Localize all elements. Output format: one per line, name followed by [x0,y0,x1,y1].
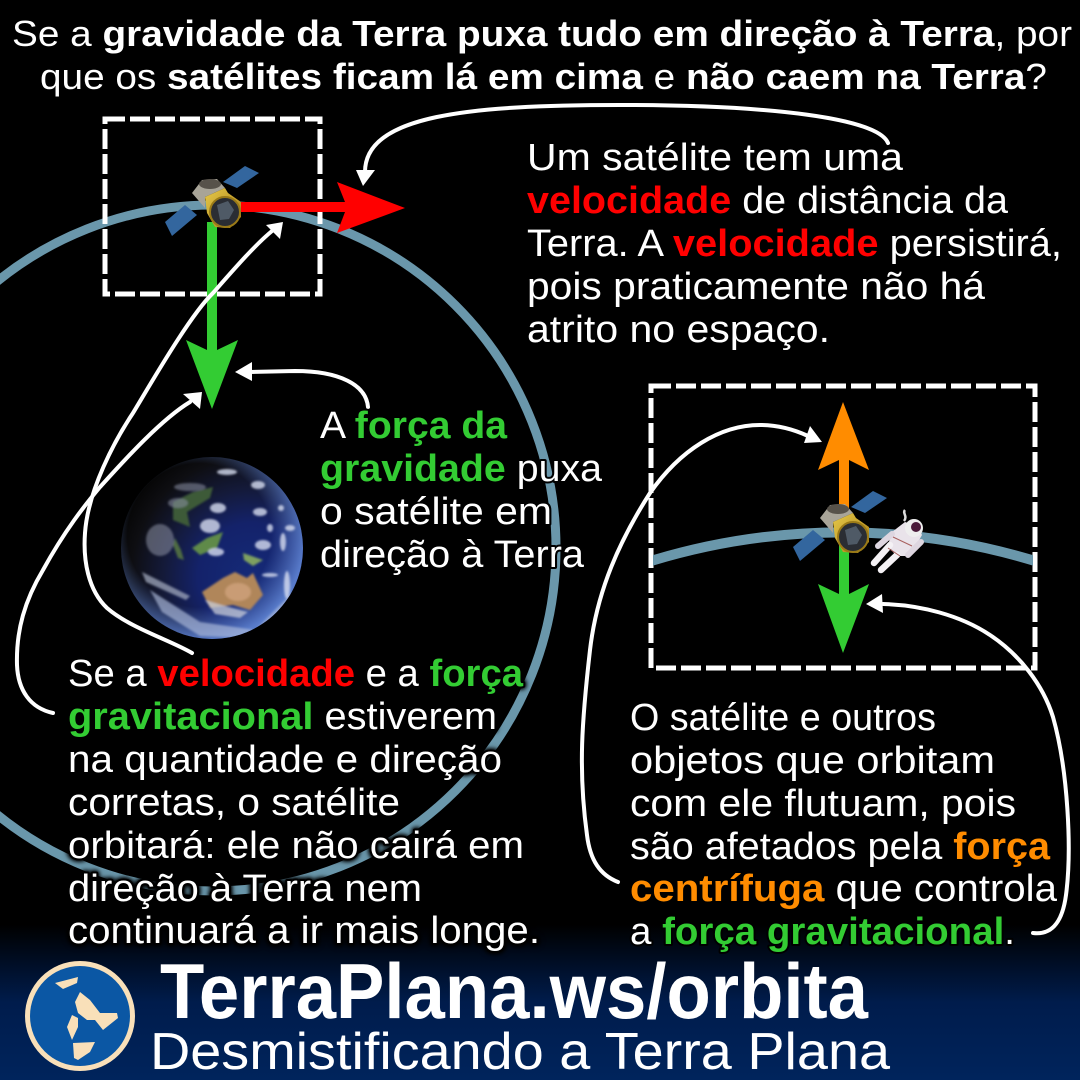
curved arrow: velocity note [356,105,888,186]
text: velocity explanation: pois praticamente não há [527,266,986,308]
title [12,13,1072,97]
text: floating explanation: O satélite e outros [630,697,936,739]
text: velocity explanation: Um satélite tem uma [527,137,904,179]
text: orbit explanation: na quantidade e direção [68,739,502,781]
curved arrow: gravity note right [866,594,1069,933]
curved arrow: gravity to lower text [17,392,202,713]
text: floating explanation: com ele flutuam, pois [630,783,1016,825]
text: orbit explanation: Se a velocidade e a força [68,653,524,695]
text: velocity explanation: atrito no espaço. [527,309,830,351]
text: gravity explanation: A força da [320,405,508,447]
arrow: velocity [235,182,405,233]
text: orbit explanation: orbitará: ele não cairá em [68,825,524,867]
text: floating explanation: objetos que orbitam [630,740,995,782]
dashed box: forces detail [651,386,1035,668]
orbit ring [0,205,556,891]
satellite [165,166,259,236]
text: velocity explanation [527,137,1062,351]
text: orbit explanation: corretas, o satélite [68,782,400,824]
text: orbit explanation: gravitacional estiverem [68,696,497,738]
text: floating explanation: centrífuga que controla [630,868,1058,910]
title: Se a gravidade da Terra puxa tudo em direção à Terra , por [12,13,1072,54]
text: velocity explanation: Terra. A velocidade persistirá, [527,223,1062,265]
icon: astronaut [874,510,923,570]
tagline: Desmistificando a Terra Plana [150,1023,890,1080]
text: orbit explanation: direção à Terra nem [68,868,422,910]
text: gravity explanation: gravidade puxa [320,448,603,490]
text: orbit explanation [68,653,540,952]
title: que os satélites ficam lá em cima e não caem na Terra ? [40,56,1047,97]
footer band [0,925,1080,1080]
logo: flat earth globe [25,961,135,1071]
icon: satellite with velocity and gravity arrows [165,166,405,409]
text: gravity explanation: o satélite em [320,491,552,533]
curved arrow: gravity note [235,362,368,407]
satellite [793,491,887,561]
website url: TerraPlana.ws/orbita [160,947,869,1035]
arrow: centrifugal force [818,402,869,510]
arrow: gravity force [818,545,869,653]
text: floating explanation: a força gravitacional. [630,911,1015,953]
icon: earth globe [121,457,303,639]
curved arrow: velocity to lower text [85,222,283,653]
orbit segment [651,532,1035,561]
dashed box: satellite detail [105,119,320,294]
arrow: gravity [186,222,238,409]
text: gravity explanation [320,405,603,576]
text: gravity explanation: direção à Terra [320,534,585,576]
curved arrow: centrifugal note [582,425,822,882]
icon: satellite with centrifugal and gravity arrows [793,402,923,653]
text: floating explanation [630,697,1058,953]
text: velocity explanation: velocidade de distância da [527,180,1009,222]
text: floating explanation: são afetados pela força [630,826,1051,868]
text: orbit explanation: continuará a ir mais longe. [68,910,540,952]
